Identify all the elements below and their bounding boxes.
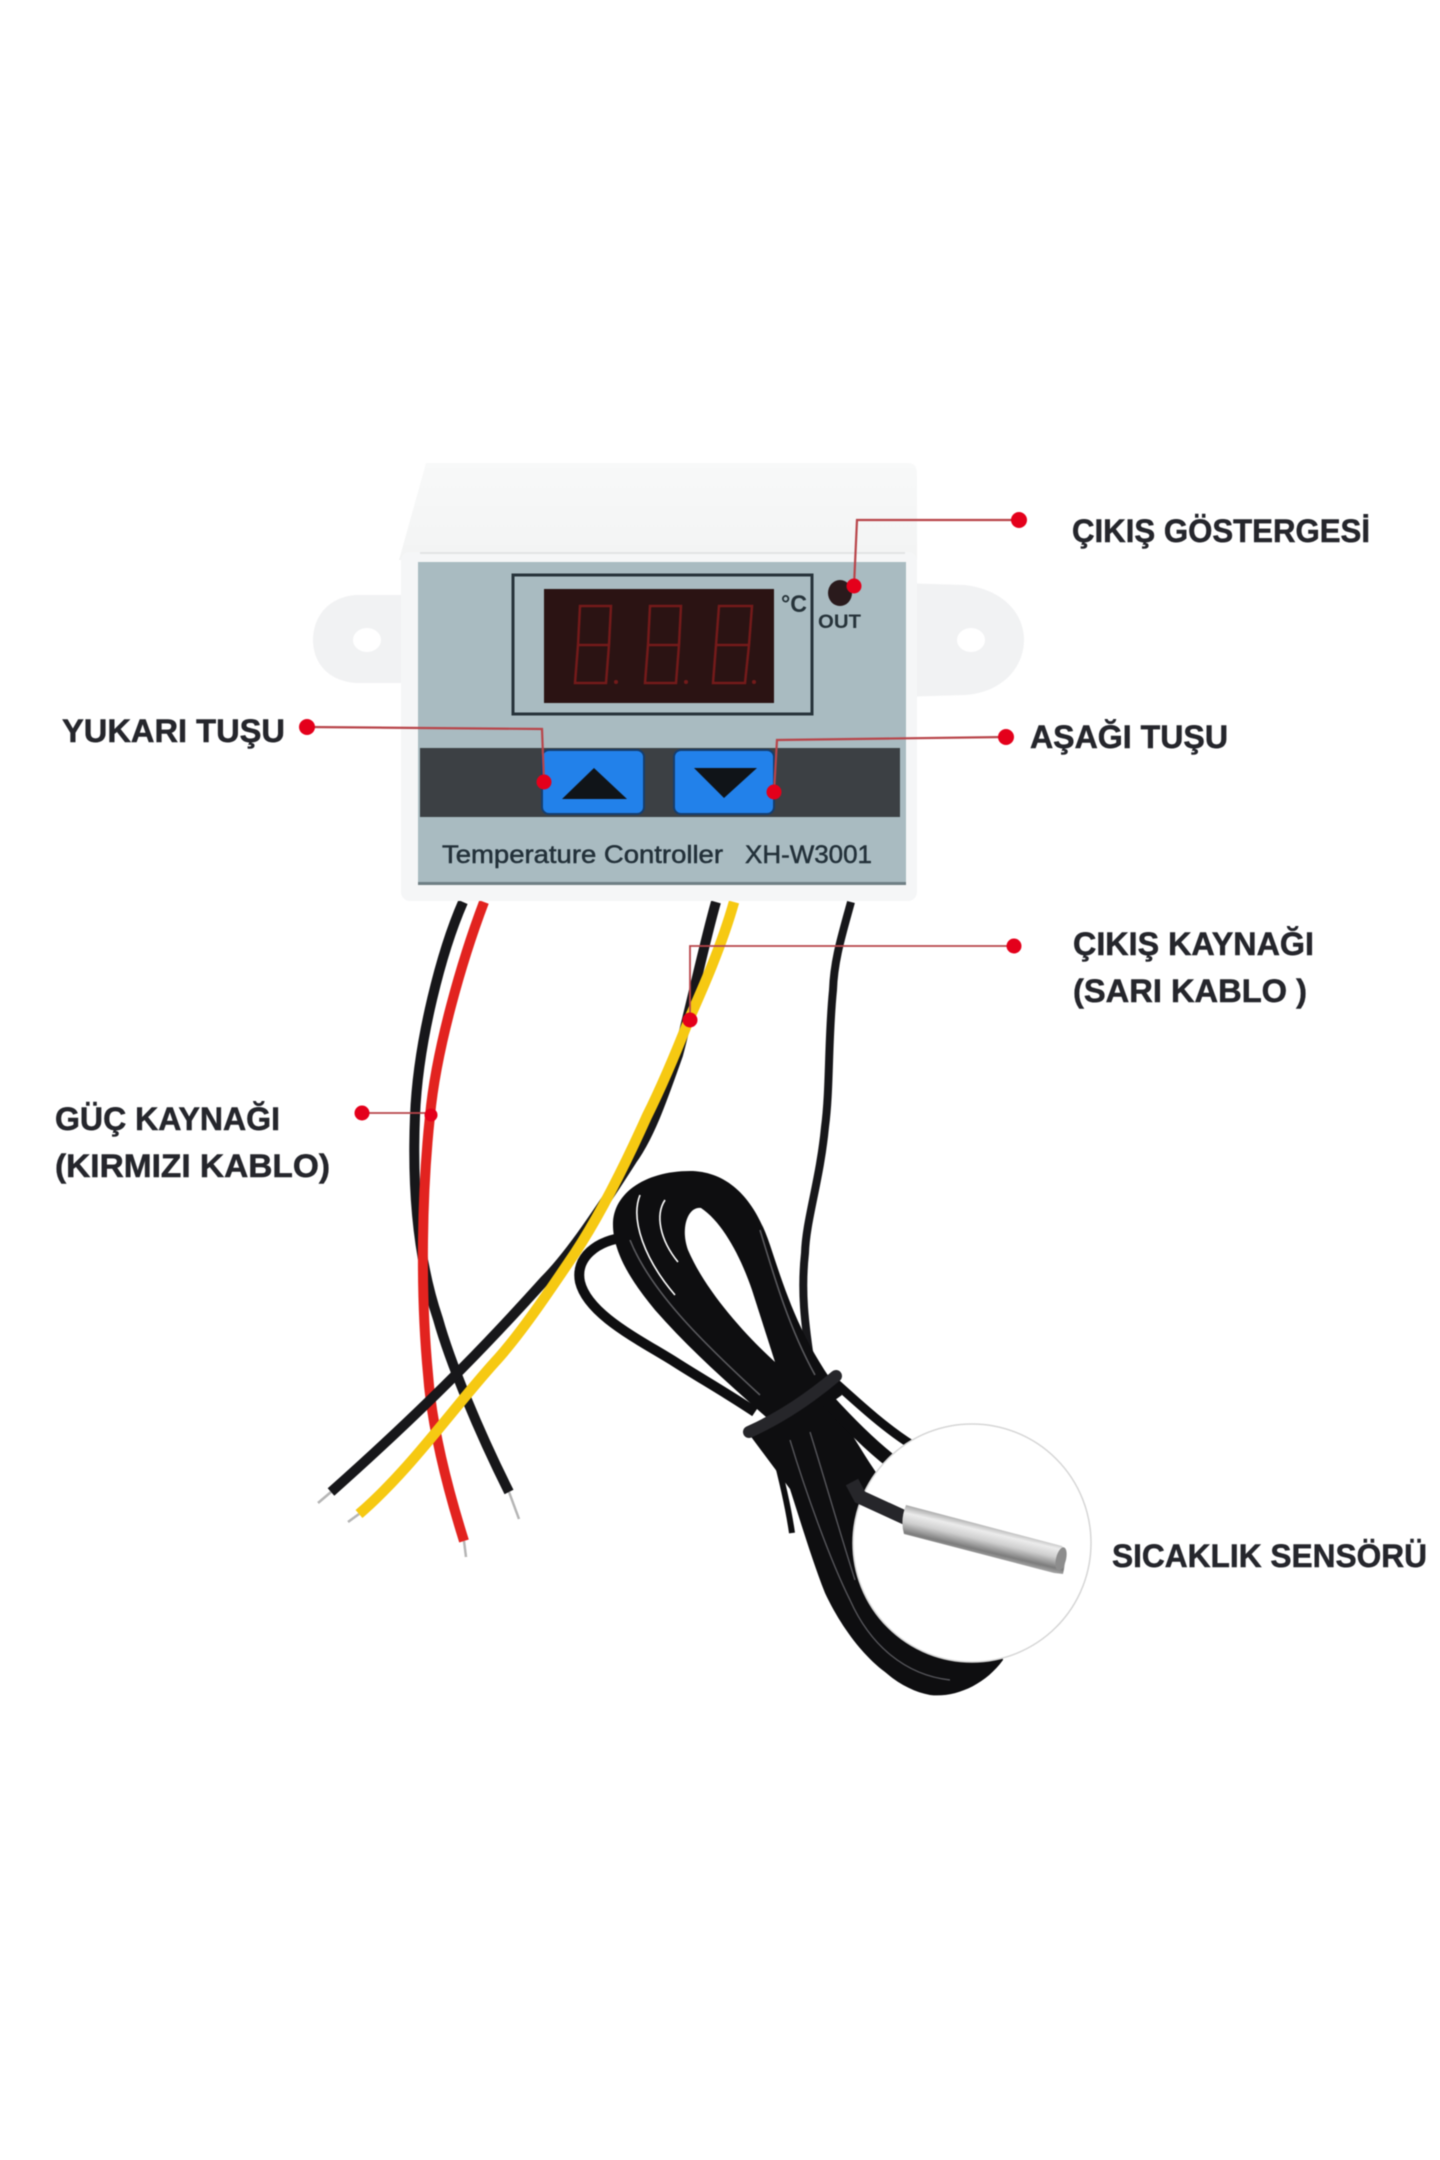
yellow wire <box>359 902 734 1514</box>
case top face <box>399 463 917 560</box>
callout: power source (red wire): GÜÇ KAYNAĞI <box>55 1101 280 1137</box>
callout: output source (yellow wire) <box>682 926 1314 1028</box>
degree sign: °C <box>781 591 807 618</box>
callout: output indicator <box>846 512 1370 594</box>
callout: down key: AŞAĞI TUŞU <box>1030 719 1228 755</box>
right mounting ear <box>900 583 1024 697</box>
OUT label: OUT <box>818 612 861 633</box>
right strands to sensor <box>830 1378 912 1445</box>
upper loop body <box>613 1171 842 1425</box>
callout: power source (red wire) <box>55 1101 438 1184</box>
tie around bundle <box>749 1376 836 1432</box>
output LED <box>828 580 852 606</box>
upper loop hole <box>685 1208 775 1362</box>
red LED display <box>544 589 774 703</box>
sensor cord <box>852 1482 908 1519</box>
decimal points <box>614 680 756 684</box>
wires: power, output and sensor leads <box>318 902 851 1557</box>
callout: up key: YUKARI TUŞU <box>62 713 285 749</box>
controller body <box>313 463 1024 901</box>
lower strand lines <box>790 1432 950 1680</box>
callout: up key <box>62 713 552 790</box>
up button <box>542 750 644 814</box>
display frame <box>513 575 812 714</box>
lower bundle <box>749 1395 1003 1695</box>
wire tips <box>318 1492 519 1557</box>
black wire, centre <box>331 902 716 1492</box>
down button <box>674 750 774 814</box>
product name: Temperature Controller <box>442 841 723 869</box>
black wire, left pair <box>414 902 509 1492</box>
black wire, right <box>803 902 851 1372</box>
callout: down key <box>766 719 1228 800</box>
left loop <box>579 1237 755 1412</box>
grey front panel <box>418 562 906 885</box>
model number: XH-W3001 <box>745 841 872 869</box>
sensor cable coil <box>579 1171 1003 1695</box>
strand gaps <box>630 1195 815 1395</box>
left mounting ear <box>313 595 410 683</box>
metal probe <box>902 1505 1065 1574</box>
callout: power source (red wire): (KIRMIZI KABLO) <box>55 1148 330 1184</box>
digits 888 <box>575 606 752 683</box>
dark button band <box>420 748 900 817</box>
magnifier circle: temperature sensor <box>852 1424 1091 1662</box>
callout: output indicator: ÇIKIŞ GÖSTERGESİ <box>1072 513 1370 549</box>
callout: output source (yellow wire): ÇIKIŞ KAYNAĞI <box>1073 926 1314 962</box>
red wire <box>423 902 484 1541</box>
label: temperature sensor: SICAKLIK SENSÖRÜ <box>1112 1538 1427 1574</box>
callout: output source (yellow wire): (SARI KABLO ) <box>1073 973 1307 1009</box>
short tail strand <box>774 1450 792 1533</box>
case front <box>401 552 917 901</box>
